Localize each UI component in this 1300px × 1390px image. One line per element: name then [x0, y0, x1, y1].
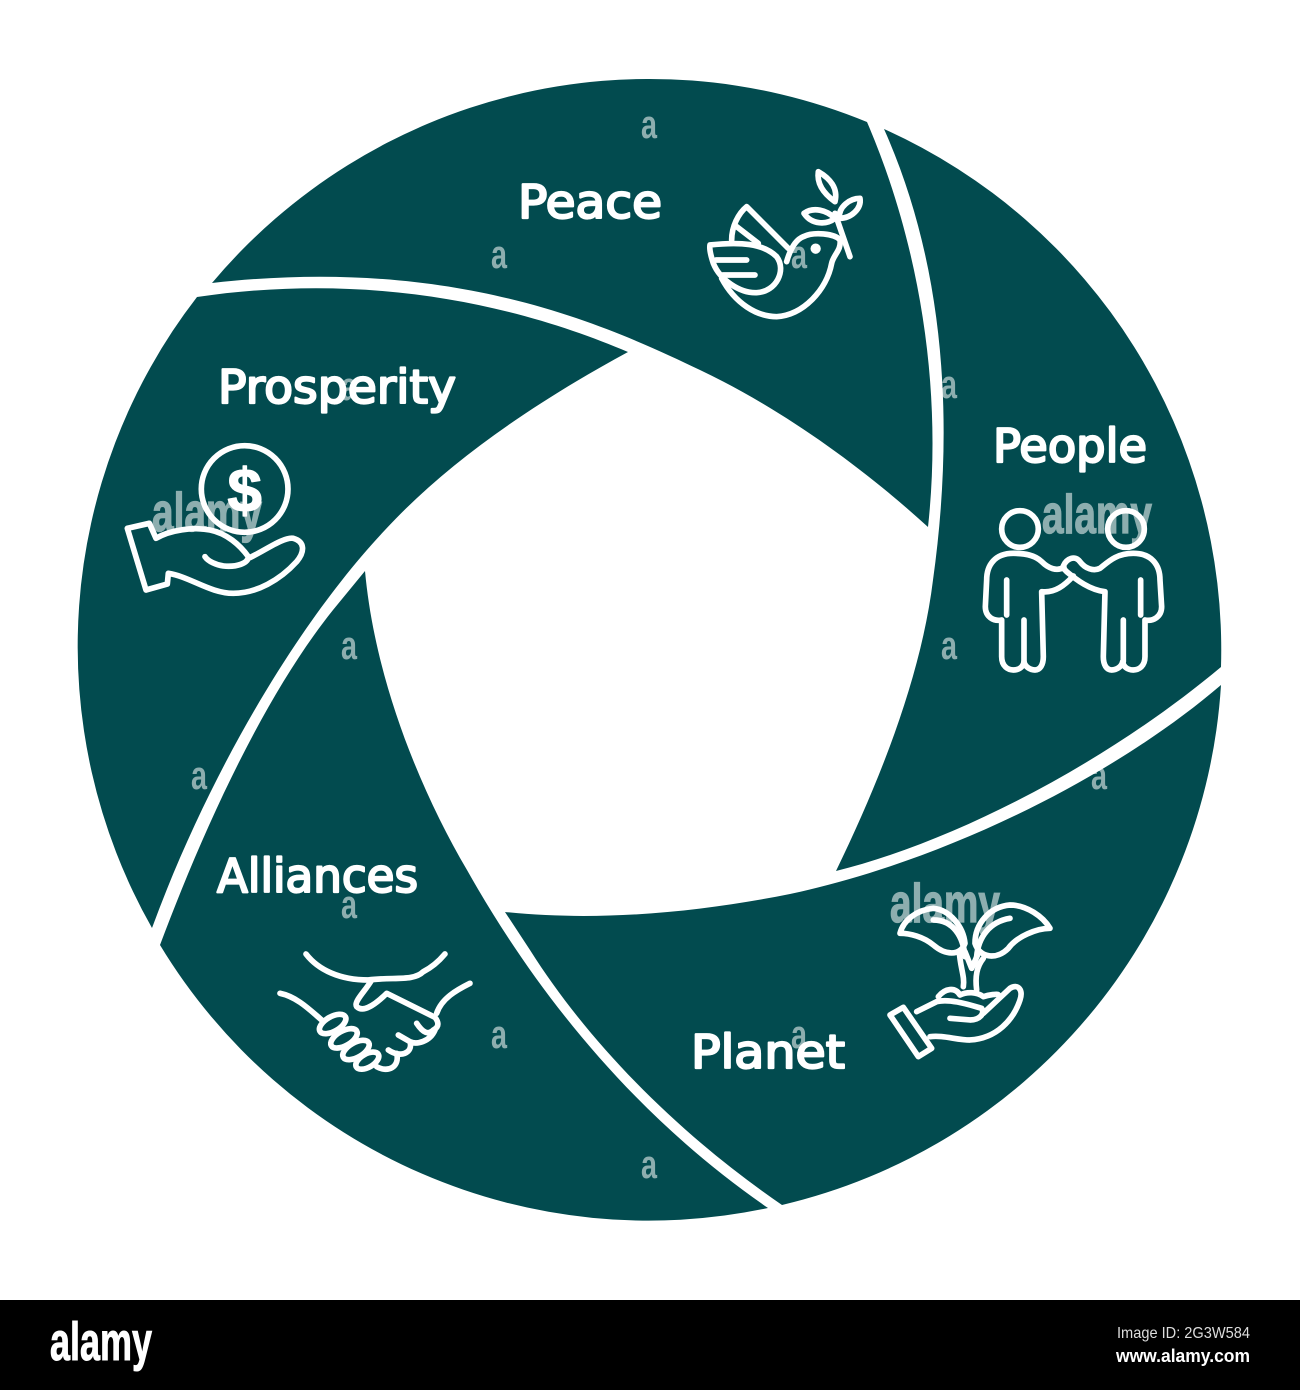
- watermarks: a: [341, 365, 358, 409]
- watermarks: alamy: [1042, 483, 1152, 545]
- icon: dove with olive branch: [710, 172, 860, 317]
- icon: two people shaking hands: [985, 511, 1162, 670]
- watermarks: a: [491, 233, 508, 277]
- watermarks: a: [641, 1143, 658, 1187]
- icon: seedling in hand: [890, 905, 1050, 1057]
- footer image id: Image ID: 2G3W584: [1117, 1325, 1250, 1342]
- segment: prosperity: [78, 288, 628, 928]
- watermarks: a: [491, 1013, 508, 1057]
- segment: peace: [212, 79, 933, 527]
- watermarks: a: [791, 233, 808, 277]
- footer bar: [0, 1300, 1300, 1390]
- watermarks: a: [191, 754, 208, 798]
- icon: hand holding dollar coin: $: [228, 456, 262, 525]
- segment: planet: [505, 685, 1221, 1205]
- watermarks: a: [791, 1013, 808, 1057]
- label: Alliances: Alliances: [217, 849, 418, 903]
- watermarks: a: [941, 363, 958, 407]
- watermarks: a: [341, 624, 358, 668]
- icon: handshake: [280, 954, 470, 1073]
- icon: hand holding dollar coin: [127, 446, 303, 593]
- segment: alliances: [160, 571, 768, 1221]
- watermarks: a: [1091, 754, 1108, 798]
- footer logo: alamy: [50, 1312, 152, 1372]
- watermarks: alamy: [890, 872, 1000, 934]
- ring diagram: [78, 79, 1221, 1221]
- watermarks: a: [341, 883, 358, 927]
- watermarks: [152, 103, 1152, 1187]
- watermarks: alamy: [152, 481, 262, 543]
- label: Planet: Planet: [691, 1025, 845, 1079]
- label: Peace: Peace: [518, 175, 662, 229]
- label: People: People: [993, 419, 1147, 473]
- label: Prosperity: Prosperity: [218, 360, 456, 414]
- watermarks: a: [641, 103, 658, 147]
- watermarks: a: [941, 624, 958, 668]
- footer url: www.alamy.com: [1115, 1346, 1250, 1366]
- segment: people: [836, 129, 1221, 871]
